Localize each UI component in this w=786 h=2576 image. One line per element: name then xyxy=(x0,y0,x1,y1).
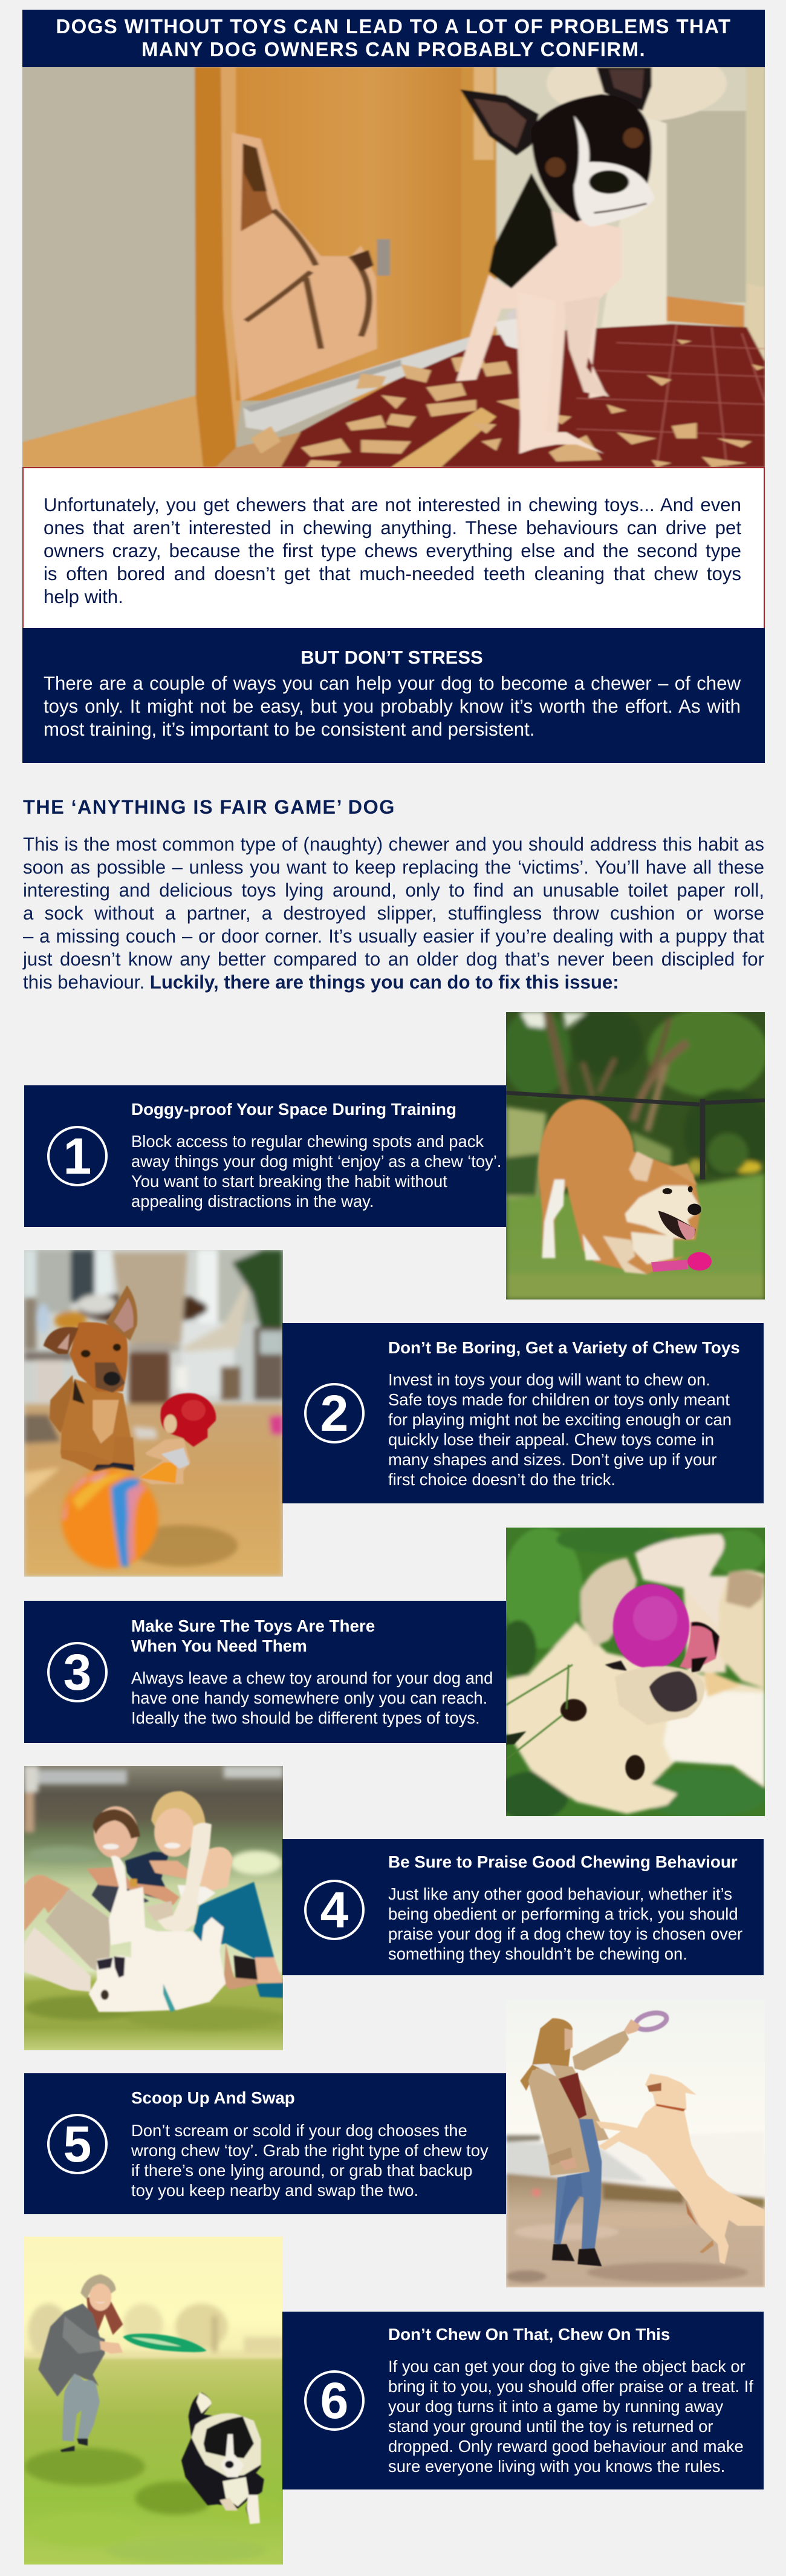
step 2 text: quickly lose their appeal. Chew toys come in xyxy=(388,1430,714,1449)
number badge 5: 5 xyxy=(63,2116,91,2172)
photo 2: puppy with toys on wood floor xyxy=(24,1250,363,1577)
step 6 text: If you can get your dog to give the object back or xyxy=(388,2357,745,2376)
panel text: toys only. It might not be easy, but you probably know it’s worth the effort. As with xyxy=(44,696,741,717)
number badge 6 xyxy=(304,2370,365,2431)
step 6 text: dropped. Only reward good behaviour and make xyxy=(388,2437,744,2456)
jeans xyxy=(62,2373,100,2442)
panel text xyxy=(44,673,741,740)
step 5 text: Don’t scream or scold if your dog chooses the xyxy=(131,2121,467,2140)
step 2 text xyxy=(388,1370,732,1489)
step 2 text: first choice doesn’t do the trick. xyxy=(388,1470,615,1489)
step 4 text: something they shouldn’t be chewing on. xyxy=(388,1944,687,1963)
coat xyxy=(528,2065,609,2176)
step 6 card xyxy=(282,2312,764,2489)
section paragraph: just doesn’t know any better compared to an older dog that’s never been discipled for xyxy=(23,949,764,970)
red toy xyxy=(160,1393,216,1447)
step 5 text: toy you keep nearby and swap the two. xyxy=(131,2181,418,2200)
step 2 card xyxy=(282,1323,764,1503)
step 1 text: Block access to regular chewing spots and pack xyxy=(131,1132,484,1151)
step 6 heading: Don’t Chew On That, Chew On This xyxy=(388,2325,670,2344)
step 3 text: have one handy somewhere only you can reach. xyxy=(131,1688,487,1707)
woman xyxy=(151,1791,206,1831)
step 3 text xyxy=(131,1669,493,1727)
panel text: most training, it’s important to be consistent and persistent. xyxy=(44,719,534,740)
step 4 heading: Be Sure to Praise Good Chewing Behaviour xyxy=(388,1852,738,1871)
panel: intro text box xyxy=(22,467,765,629)
title banner: MANY DOG OWNERS CAN PROBABLY CONFIRM. xyxy=(141,38,646,60)
jeans xyxy=(554,2119,602,2249)
intro paragraph: is often bored and doesn’t get that much-needed teeth cleaning that chew toys xyxy=(44,563,741,584)
step 4 card xyxy=(282,1839,764,1975)
section paragraph xyxy=(22,834,764,993)
step 6 text: sure everyone living with you knows the rules. xyxy=(388,2457,725,2476)
step 3 heading: Make Sure The Toys Are There xyxy=(131,1617,375,1635)
dog xyxy=(145,1823,212,1934)
photo 1: dog bowing with pink toy xyxy=(506,1012,765,1299)
title banner: DOGS WITHOUT TOYS CAN LEAD TO A LOT OF PROBLEMS THAT xyxy=(56,15,732,38)
photo 3: dog on back with pink ball xyxy=(506,1528,765,1816)
number badge 3: 3 xyxy=(63,1644,91,1701)
photo 6: woman throwing frisbee to dog xyxy=(24,2237,283,2565)
rope toy xyxy=(138,1439,190,1484)
step 1 text: away things your dog might ‘enjoy’ as a chew ‘toy’. xyxy=(131,1152,502,1171)
step 5 card xyxy=(24,2073,506,2214)
hair xyxy=(520,2018,573,2091)
number badge 1: 1 xyxy=(63,1128,91,1185)
debris xyxy=(251,339,765,467)
photo 5: woman and dog on the beach xyxy=(506,2010,765,2287)
section heading: THE ‘ANYTHING IS FAIR GAME’ DOG xyxy=(23,796,395,818)
panel text: There are a couple of ways you can help your dog to become a chewer – of chew xyxy=(44,673,741,694)
step 6 text xyxy=(388,2357,753,2476)
step 5 text: if there’s one lying around, or grab that backup xyxy=(131,2161,472,2180)
section paragraph: a sock without a partner, a destroyed slipper, stuffingless throw cushion or worse xyxy=(23,903,764,924)
step 2 text: Safe toys made for children or toys only meant xyxy=(388,1390,730,1409)
number badge 1 xyxy=(47,1126,108,1186)
step 3 card xyxy=(24,1601,506,1743)
section paragraph: interesting and delicious toys lying around, only to find an unusable toilet paper roll, xyxy=(23,880,764,901)
step 2 text: for playing might not be exciting enough or can xyxy=(388,1410,732,1429)
step 5 heading: Scoop Up And Swap xyxy=(131,2088,295,2107)
hero photo: boston terrier beside chewed door xyxy=(22,67,765,467)
chewed door damage xyxy=(232,132,377,401)
step 3 text: Always leave a chew toy around for your dog and xyxy=(131,1669,493,1687)
intro paragraph: owners crazy, because the first type chews everything else and the second type xyxy=(44,540,741,561)
frisbee xyxy=(123,2333,207,2352)
photo 4: couple playing with white dog xyxy=(24,1766,283,2050)
section paragraph: soon as possible – unless you want to keep replacing the ‘victims’. You’ll have all these xyxy=(23,857,764,878)
step 4 text: Just like any other good behaviour, whether it’s xyxy=(388,1885,732,1903)
number badge 4 xyxy=(304,1880,365,1940)
number badge 2 xyxy=(304,1383,365,1443)
step 5 text xyxy=(131,2121,489,2200)
step 2 text: many shapes and sizes. Don’t give up if your xyxy=(388,1450,717,1469)
dog body xyxy=(506,1623,765,1814)
number badge 5 xyxy=(47,2114,108,2174)
number badge 6: 6 xyxy=(320,2372,348,2429)
step 3 heading: When You Need Them xyxy=(131,1636,307,1655)
step 4 text: praise your dog if a dog chew toy is chosen over xyxy=(388,1924,742,1943)
hat and face xyxy=(80,2274,116,2300)
step 1 card xyxy=(24,1085,506,1227)
dog xyxy=(181,2393,264,2523)
boots xyxy=(552,2244,574,2261)
section paragraph: This is the most common type of (naughty) chewer and you should address this habit as xyxy=(23,834,764,855)
step 2 heading: Don’t Be Boring, Get a Variety of Chew Toys xyxy=(388,1338,740,1357)
step 4 text: being obedient or performing a trick, you should xyxy=(388,1904,738,1923)
step 6 text: stand your ground until the toy is returned or xyxy=(388,2417,713,2436)
step 5 text: wrong chew ‘toy’. Grab the right type of chew toy xyxy=(131,2141,489,2160)
intro paragraph: Unfortunately, you get chewers that are not interested in chewing toys... And even xyxy=(44,494,741,515)
step 6 text: your dog turns it into a game by running away xyxy=(388,2397,723,2416)
section paragraph: – a missing couch – or door corner. It’s usually easier if you’re dealing with a puppy that xyxy=(23,926,764,947)
step 1 text: You want to start breaking the habit without xyxy=(131,1172,447,1191)
step 3 heading xyxy=(131,1617,375,1655)
bowls xyxy=(506,307,562,324)
step 1 text xyxy=(131,1132,502,1211)
section paragraph: this behaviour. Luckily, there are things you can do to fix this issue: xyxy=(23,972,619,993)
step 6 text: bring it to you, you should offer praise or a treat. If xyxy=(388,2377,753,2396)
terrier xyxy=(456,67,654,454)
title banner xyxy=(22,10,765,67)
arm xyxy=(573,2030,629,2071)
step 2 text: Invest in toys your dog will want to chew on. xyxy=(388,1370,710,1389)
man xyxy=(24,1875,71,1931)
dog xyxy=(596,2074,765,2264)
number badge 4: 4 xyxy=(320,1881,348,1938)
number badge 3 xyxy=(47,1642,108,1702)
step 1 text: appealing distractions in the way. xyxy=(131,1192,374,1211)
step 3 text: Ideally the two should be different types of toys. xyxy=(131,1708,480,1727)
hair behind xyxy=(86,2297,123,2335)
intro paragraph: help with. xyxy=(44,586,123,607)
number badge 2: 2 xyxy=(320,1385,348,1442)
ring xyxy=(634,2010,668,2033)
intro paragraph: ones that aren’t interested in chewing anything. These behaviours can drive pet xyxy=(44,517,741,538)
panel heading: BUT DON’T STRESS xyxy=(300,647,483,668)
intro paragraph xyxy=(44,494,741,607)
panel: but don't stress xyxy=(22,628,765,763)
step 4 text xyxy=(388,1885,742,1963)
step 1 heading: Doggy-proof Your Space During Training xyxy=(131,1100,456,1119)
sweater xyxy=(38,2304,105,2396)
